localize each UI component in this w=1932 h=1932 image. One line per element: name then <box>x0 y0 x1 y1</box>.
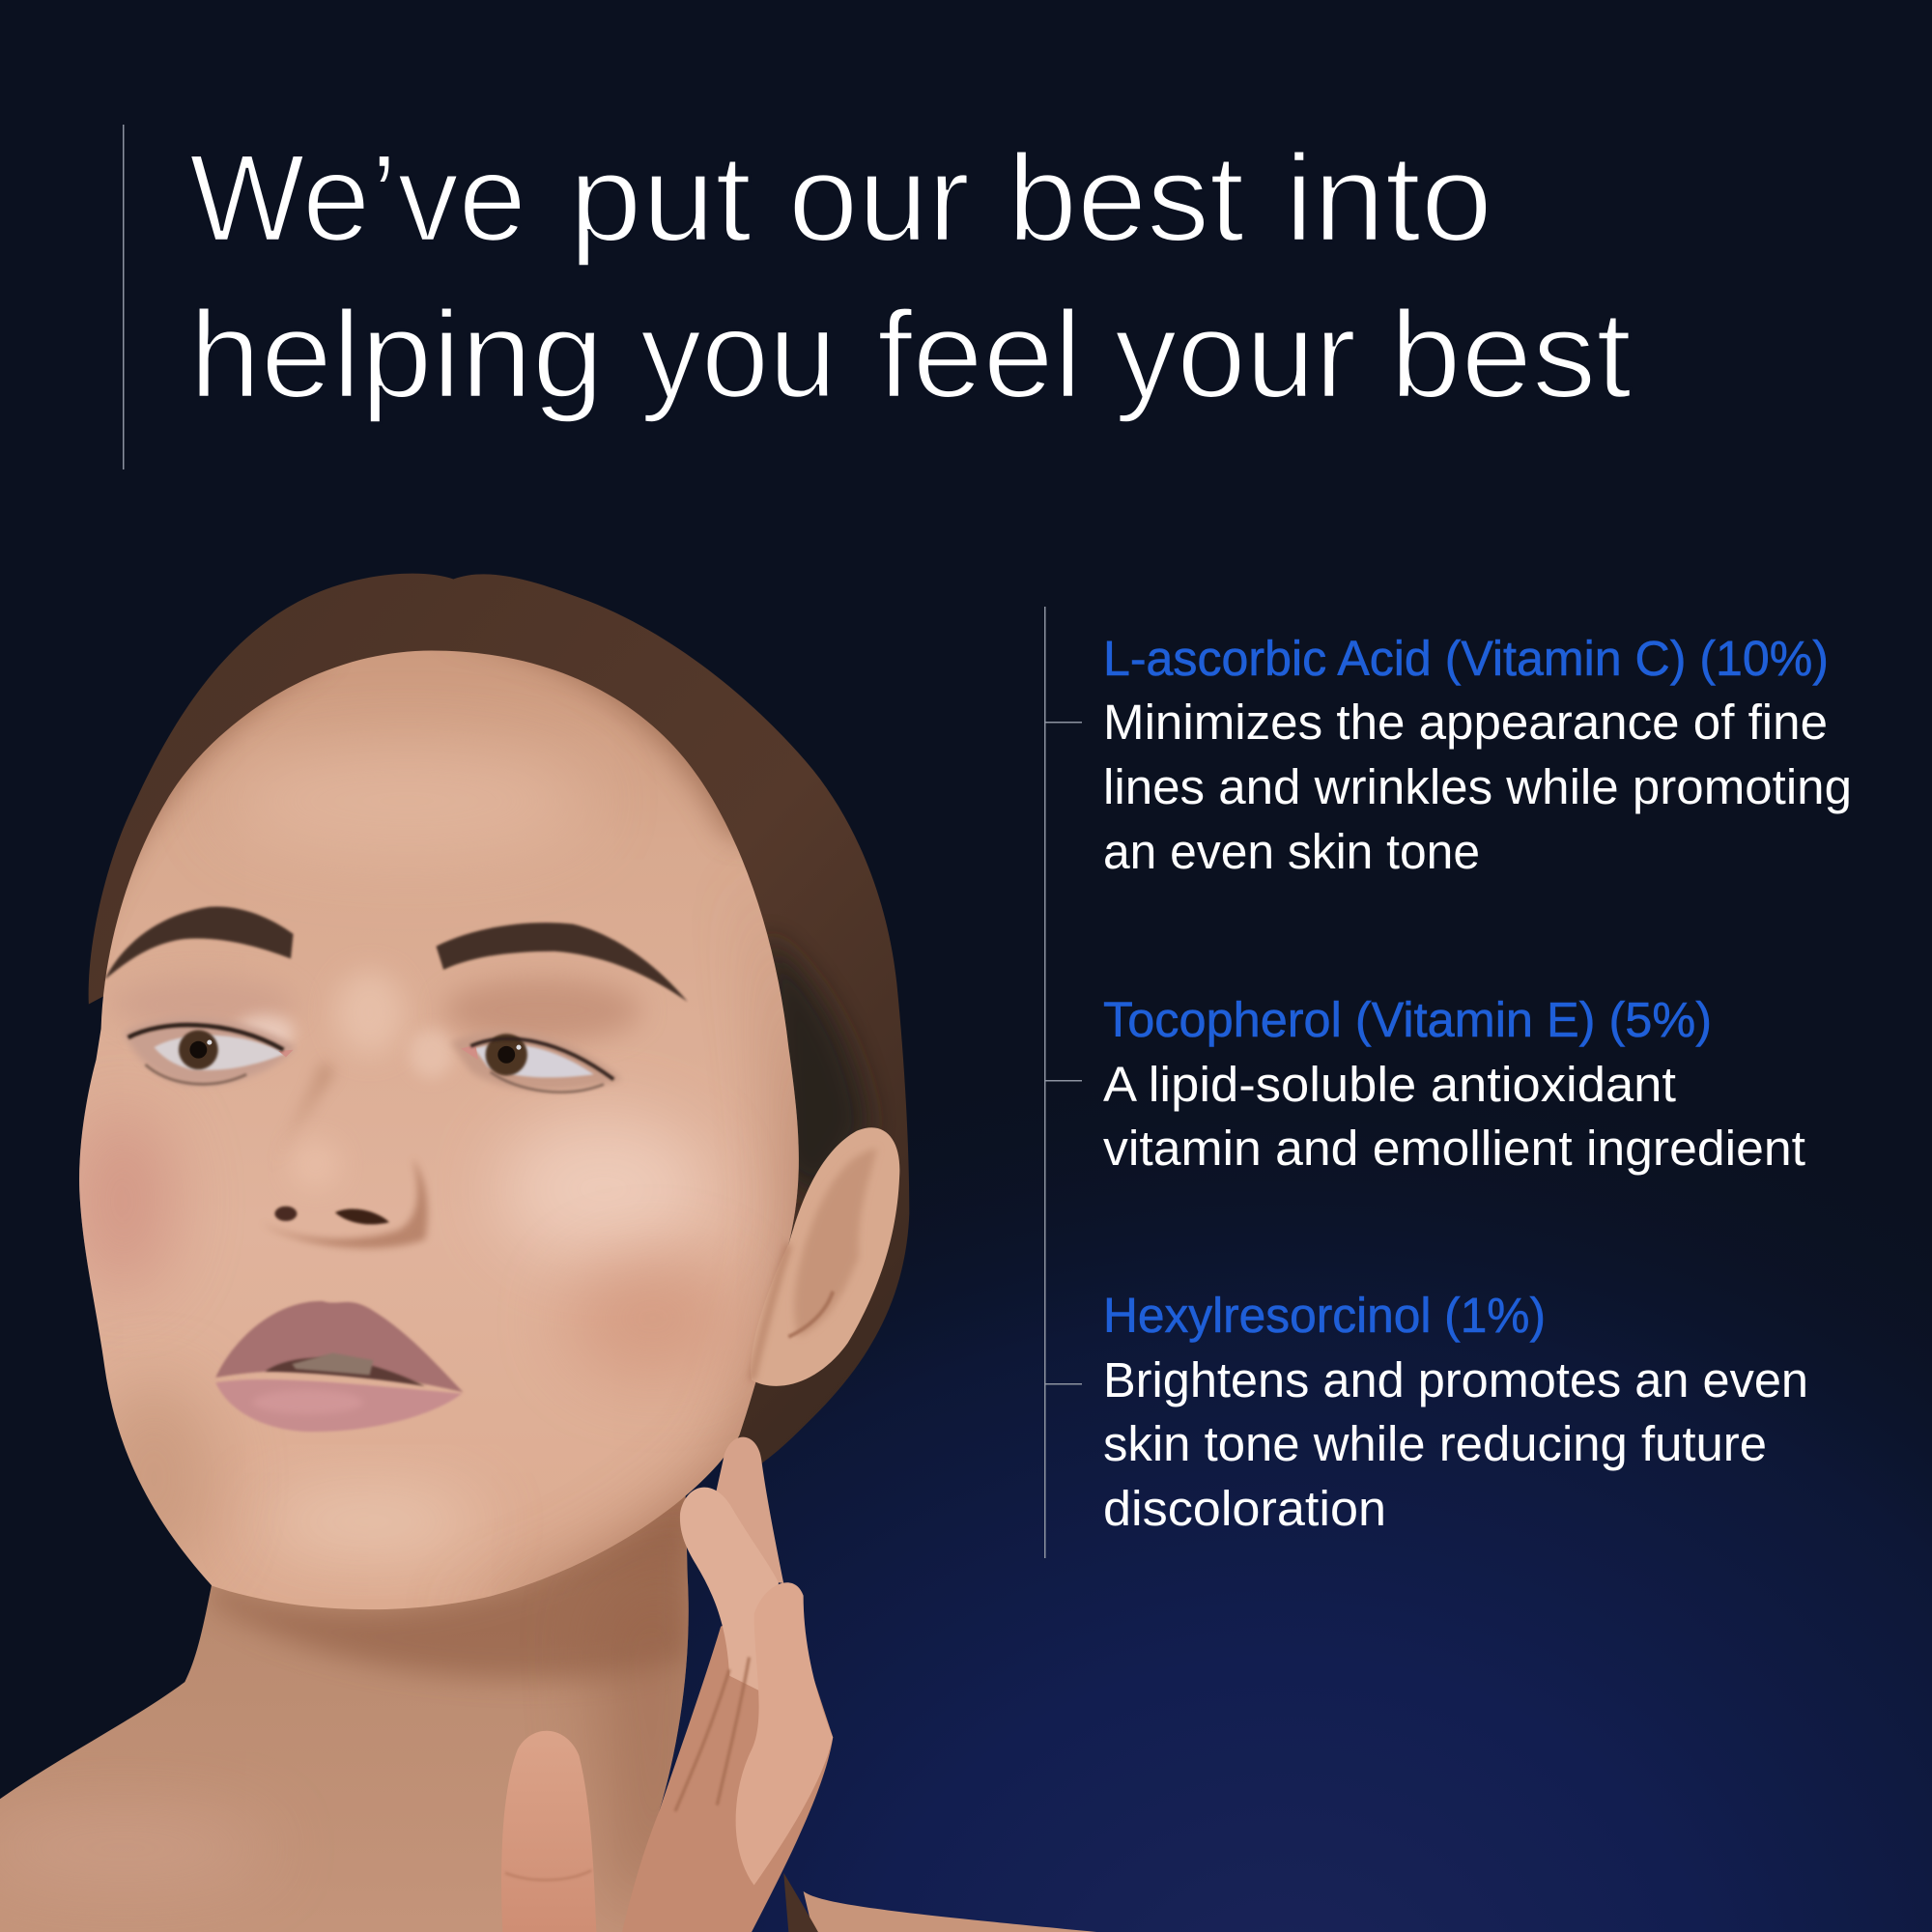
description: vitamin C <box>1103 695 1852 879</box>
description: vitamin E: vitamin and emollient ingredient <box>1103 1121 1805 1176</box>
heading: hexylresorcinol: Hexylresorcinol (1%) <box>1103 1288 1546 1343</box>
left eye <box>124 1017 296 1085</box>
nose <box>261 1060 428 1248</box>
hand <box>501 1437 833 1932</box>
title: best <box>1008 129 1244 268</box>
thumb <box>501 1731 596 1932</box>
description: hexylresorcinol <box>1103 1352 1808 1536</box>
finger: middle <box>712 1437 783 1583</box>
heading: vitamin C: L-ascorbic Acid (Vitamin C) (10%) <box>1103 631 1829 686</box>
title: We’ve <box>189 129 526 268</box>
description: vitamin E <box>1103 1057 1805 1176</box>
description: vitamin C: Minimizes the appearance of fine <box>1103 695 1828 750</box>
title: your <box>1115 286 1356 424</box>
ingredient bracket line <box>1044 607 1082 1558</box>
title: our <box>788 129 970 268</box>
lips <box>215 1301 464 1432</box>
palm <box>622 1602 833 1932</box>
description: vitamin E: A lipid-soluble antioxidant <box>1103 1057 1676 1112</box>
title <box>189 129 1632 424</box>
hair shadow near ear <box>764 936 868 1202</box>
face shading <box>128 674 319 889</box>
description: hexylresorcinol: skin tone while reducing future <box>1103 1416 1767 1471</box>
ingredient: vitamin E <box>1103 992 1805 1176</box>
right eyebrow <box>437 923 688 1002</box>
title: helping <box>189 286 604 424</box>
description: hexylresorcinol: discoloration <box>1103 1481 1386 1536</box>
finger: index <box>680 1488 779 1694</box>
title: best <box>1390 286 1632 424</box>
left eyebrow <box>104 906 294 980</box>
hair <box>89 574 909 1468</box>
ingredient: hexylresorcinol <box>1103 1288 1808 1536</box>
neck and shoulders <box>0 1479 1096 1932</box>
title divider line <box>123 125 124 469</box>
ingredient: vitamin C <box>1103 631 1852 879</box>
finger: ring <box>736 1582 833 1886</box>
ear <box>751 1127 899 1386</box>
title: into <box>1285 129 1492 268</box>
description: vitamin C: an even skin tone <box>1103 824 1480 879</box>
description: hexylresorcinol: Brightens and promotes an even <box>1103 1352 1808 1407</box>
title: feel <box>877 286 1082 424</box>
model portrait illustration <box>0 574 1096 1932</box>
description: vitamin C: lines and wrinkles while promoting <box>1103 759 1852 814</box>
title: put <box>569 129 752 268</box>
face <box>79 651 799 1609</box>
title: you <box>640 286 837 424</box>
heading: vitamin E: Tocopherol (Vitamin E) (5%) <box>1103 992 1712 1047</box>
right eye <box>451 1031 622 1093</box>
